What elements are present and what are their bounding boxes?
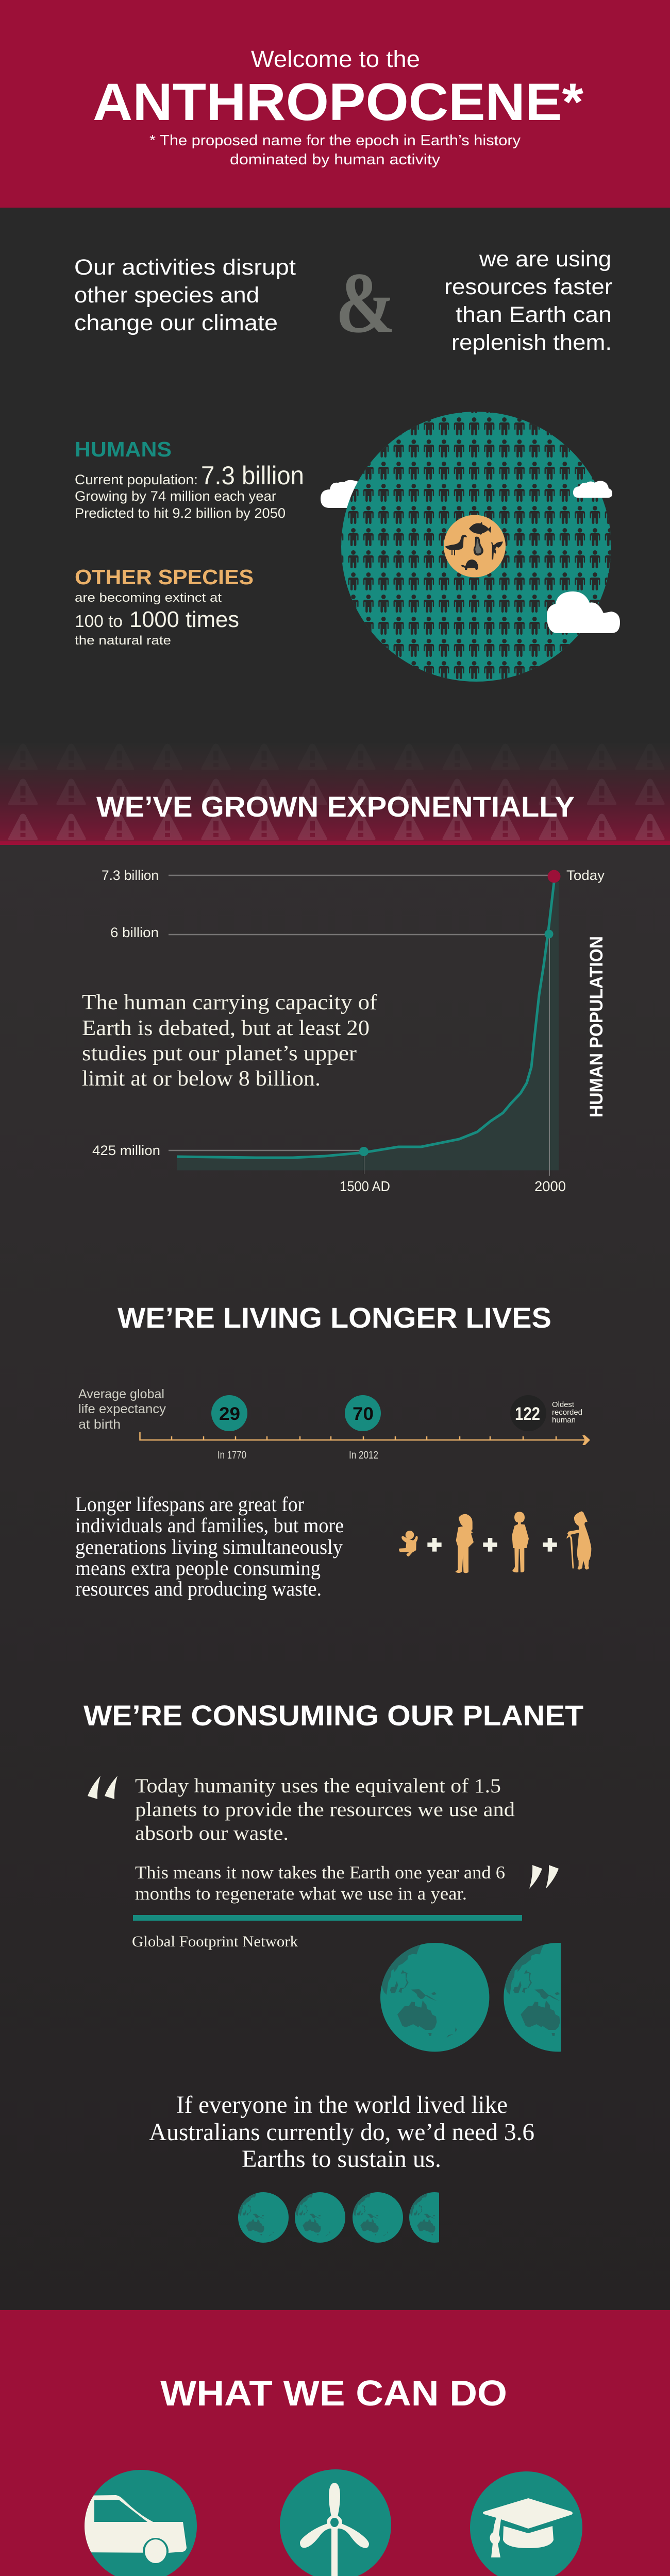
label: average life expectancy: at birth — [78, 1417, 121, 1432]
label: average life expectancy — [78, 1387, 166, 1432]
text block: humans: Growing by 74 million each year — [75, 488, 276, 504]
text block: humans: 7.3 billion — [201, 461, 304, 490]
text block: resources — [444, 247, 612, 355]
icon: graduation cap — [470, 2471, 582, 2576]
marker: today — [547, 870, 561, 883]
marker: 29 — [211, 1395, 247, 1431]
text block: longer lifespans: resources and producing waste. — [75, 1577, 322, 1600]
area under curve — [177, 882, 559, 1171]
text block: disrupt: change our climate — [74, 311, 278, 335]
label: in 1770: In 1770 — [217, 1449, 246, 1461]
marker: 6 billion — [544, 929, 554, 939]
text block: humans — [75, 437, 304, 521]
label: oldest recorded human: Oldest — [552, 1400, 575, 1409]
marker: 70: 70 — [353, 1404, 374, 1424]
text block: humans: Current population: — [75, 472, 198, 487]
icon: cloud lower right — [547, 591, 620, 633]
text block: humans: Predicted to hit 9.2 billion by 2050 — [75, 505, 286, 521]
circle: other species — [444, 515, 506, 577]
panel: what we can do — [0, 2310, 670, 2576]
chart: human population growth — [92, 868, 607, 1194]
text block: longer lifespans — [75, 1493, 344, 1600]
text block: longer lifespans: Longer lifespans are great for — [75, 1493, 304, 1516]
text block: humans: HUMANS — [75, 437, 172, 461]
text block: definition — [149, 132, 521, 168]
axis labels — [92, 868, 607, 1194]
icon: plus — [543, 1538, 557, 1552]
marker: 70 — [345, 1395, 381, 1431]
axis labels: 7.3 billion — [102, 868, 159, 883]
column: consume less — [85, 2470, 197, 2576]
column: education — [462, 2471, 596, 2576]
text block: Australians: If everyone in the world lived like — [176, 2091, 508, 2119]
icon: cloud left — [321, 480, 358, 508]
column: innovate — [280, 2469, 391, 2576]
panel: dark intro background — [0, 208, 670, 743]
icon: baby — [399, 1531, 418, 1556]
text block: other species — [75, 565, 254, 648]
panel: warning band header — [0, 743, 670, 845]
label: oldest recorded human: recorded — [552, 1408, 582, 1417]
marker: 122: 122 — [515, 1404, 540, 1424]
text block: quote first paragraph: Today humanity uses the equivalent of 1.5 — [135, 1775, 501, 1797]
text block: resources: resources faster — [444, 275, 612, 299]
icon: 1.5 earths — [380, 1943, 561, 2052]
text block: other species: OTHER SPECIES — [75, 565, 254, 589]
text block: longer lifespans: individuals and families, but more — [75, 1514, 344, 1537]
marker: 1500 AD — [359, 1147, 368, 1156]
panel: dark lower background — [0, 845, 670, 2311]
icon: open quote — [88, 1776, 118, 1799]
text block: Australians — [149, 2091, 534, 2173]
heading: consuming our planet: WE’RE CONSUMING OUR PLANET — [83, 1699, 583, 1732]
chart: population globe — [341, 412, 611, 682]
axis labels: 2000 — [534, 1178, 566, 1194]
quote: global footprint network — [88, 1775, 559, 1950]
heading: welcome: Welcome to the — [251, 46, 420, 72]
icon: cloud top right — [573, 481, 612, 498]
axis labels: HUMAN POPULATION — [587, 936, 607, 1117]
text block: quote first paragraph — [135, 1775, 515, 1844]
text block: disrupt: other species and — [74, 283, 259, 308]
text block: Australians: Australians currently do, we’d need 3.6 — [149, 2119, 534, 2146]
label: oldest recorded human: human — [552, 1416, 576, 1425]
icon: peanut — [474, 537, 483, 555]
text block: disrupt — [74, 255, 296, 335]
axis labels: 1500 AD — [340, 1178, 390, 1194]
text block: carrying capacity: Earth is debated, but at least 20 — [82, 1016, 370, 1040]
axis arrow — [140, 1432, 590, 1445]
text block: quote first paragraph: planets to provide the resources we use and — [135, 1799, 515, 1821]
icon: 3.6 earths — [238, 2192, 439, 2243]
axis labels: Today — [566, 868, 605, 883]
text block: quote second paragraph: This means it now takes the Earth one year and 6 — [135, 1862, 505, 1883]
icon: plus — [427, 1538, 442, 1552]
label: source: Global Footprint Network — [132, 1933, 298, 1950]
text block: quote second paragraph: months to regenerate what we use in a year. — [135, 1884, 467, 1904]
icon: family generations — [399, 1511, 591, 1573]
panel: title header — [0, 0, 670, 208]
label: oldest recorded human — [552, 1400, 582, 1425]
heading: grown exponentially: WE’VE GROWN EXPONENTIALLY — [96, 790, 575, 823]
axis labels: 6 billion — [110, 925, 159, 940]
icon: leaf — [491, 541, 503, 560]
curve line — [177, 882, 554, 1158]
marker: 29: 29 — [219, 1404, 240, 1424]
icon: plus — [483, 1538, 497, 1552]
icon: turtle — [461, 560, 478, 570]
text block: other species: 1000 times — [129, 607, 239, 632]
icon: adult with long hair — [455, 1514, 474, 1573]
text block: resources: we are using — [479, 247, 611, 272]
text block: carrying capacity: The human carrying capacity of — [82, 991, 377, 1014]
text block: quote first paragraph: absorb our waste. — [135, 1822, 289, 1844]
text block: other species: the natural rate — [75, 634, 171, 648]
text block: disrupt: Our activities disrupt — [74, 255, 296, 280]
label: in 2012: In 2012 — [349, 1449, 378, 1461]
heading: living longer: WE’RE LIVING LONGER LIVES — [118, 1301, 551, 1334]
icon: ampersand: & — [336, 255, 395, 351]
text block: other species: are becoming extinct at — [75, 591, 222, 605]
text block: carrying capacity: studies put our planet’s upper — [82, 1042, 357, 1065]
text block: carrying capacity — [82, 991, 377, 1091]
icon: elder with cane — [566, 1511, 591, 1570]
text block: definition: * The proposed name for the epoch in Earth’s history — [149, 132, 521, 149]
icon: car — [77, 2470, 197, 2576]
pattern: warning triangles — [8, 744, 665, 840]
title: Anthropocene: ANTHROPOCENE* — [93, 73, 583, 131]
icon: fish — [469, 522, 491, 535]
text block: Australians: Earths to sustain us. — [242, 2145, 441, 2173]
heading: what we can do: WHAT WE CAN DO — [160, 2373, 507, 2413]
icon: wind turbine — [280, 2469, 391, 2576]
text block: quote second paragraph — [135, 1862, 505, 1904]
text block: resources: than Earth can — [456, 302, 612, 327]
label: average life expectancy: Average global — [78, 1387, 164, 1401]
text block: resources: replenish them. — [451, 330, 612, 355]
text block: longer lifespans: means extra people consuming — [75, 1556, 321, 1580]
axis labels: 425 million — [92, 1143, 160, 1158]
label: average life expectancy: life expectancy — [78, 1402, 166, 1416]
text block: other species: 100 to — [75, 612, 123, 631]
text block: carrying capacity: limit at or below 8 billion. — [82, 1067, 321, 1091]
text block: definition: dominated by human activity — [230, 151, 441, 168]
icon: close quote — [529, 1865, 559, 1889]
text block: longer lifespans: generations living simultaneously — [75, 1535, 343, 1558]
icon: goose — [445, 535, 467, 555]
icon: adult — [512, 1512, 529, 1572]
marker: 122 — [510, 1395, 546, 1431]
chart: life expectancy timeline — [78, 1387, 590, 1461]
